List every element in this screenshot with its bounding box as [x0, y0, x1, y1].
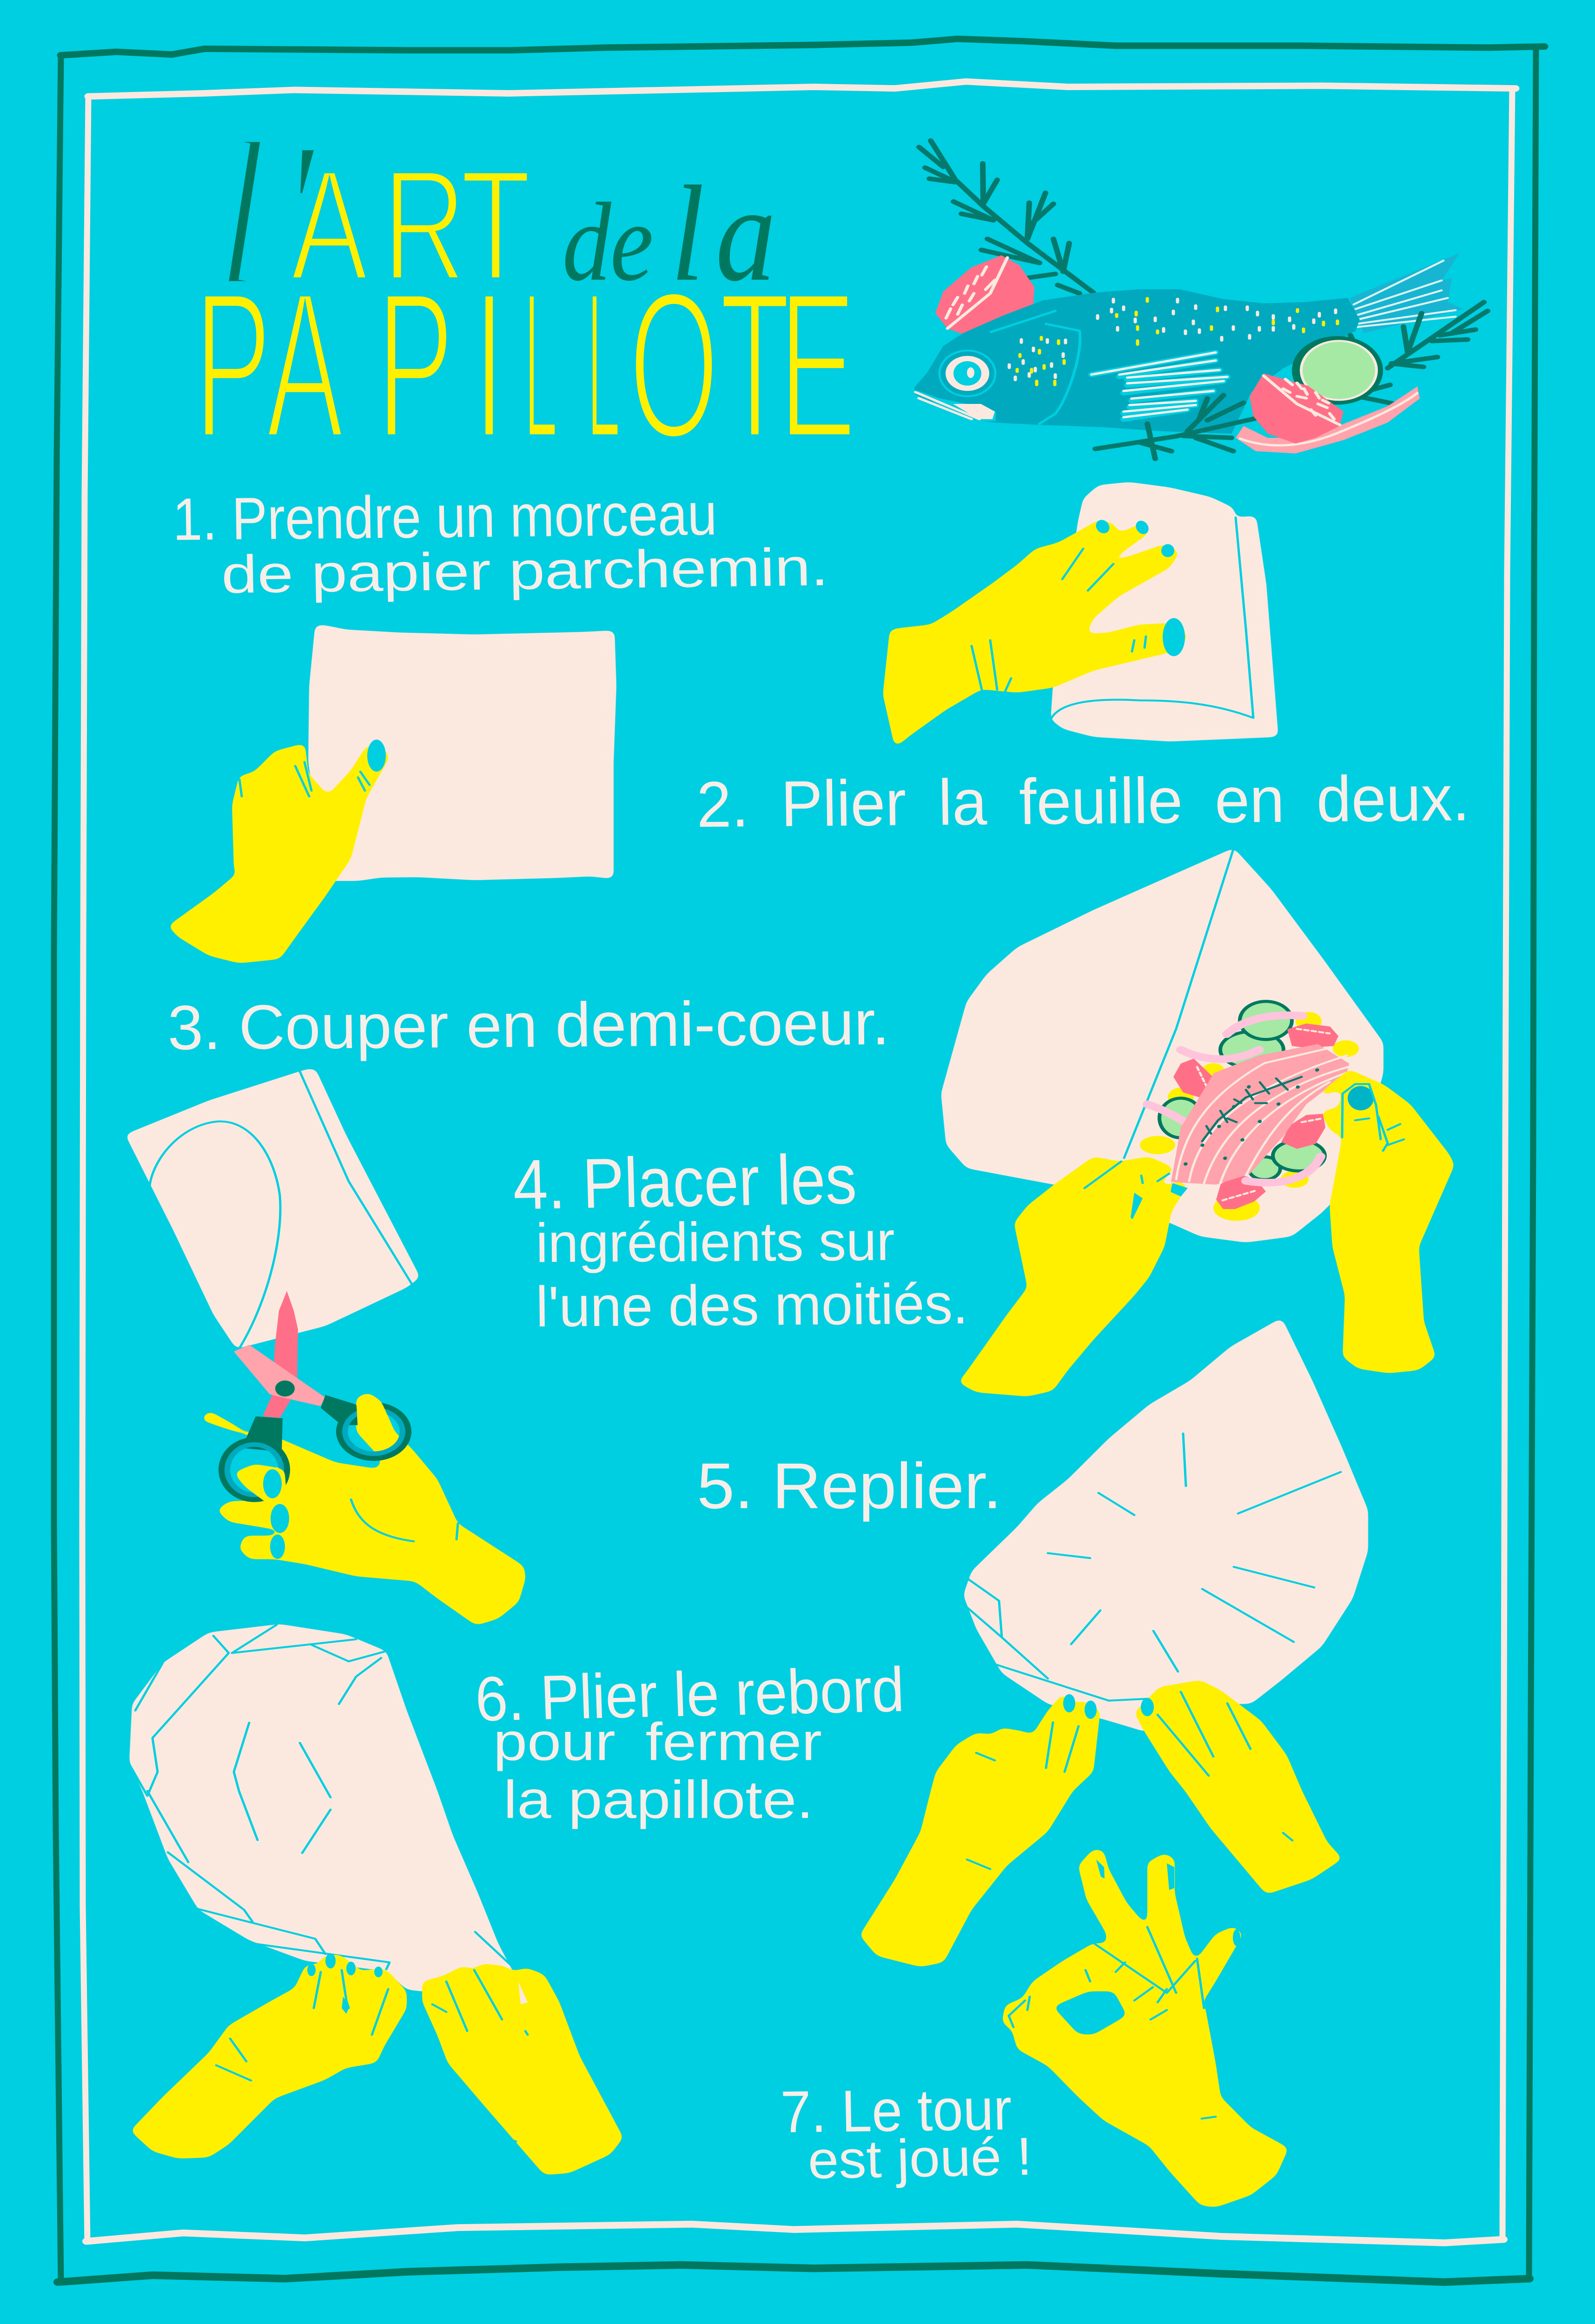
left hand	[130, 1954, 407, 2159]
title word: la: la	[671, 158, 776, 310]
dill sprig right	[1350, 302, 1488, 404]
left hand	[860, 1694, 1100, 1967]
step 1 illustration: paper and hand	[168, 625, 616, 963]
title word: PAPI: PAPI	[194, 248, 505, 482]
title word: OTE: OTE	[629, 248, 856, 482]
fish mouth	[914, 390, 996, 421]
title	[194, 98, 856, 482]
fish gill	[991, 311, 1080, 424]
dark pink blade	[263, 1291, 298, 1418]
right hand	[1134, 1680, 1343, 1895]
fish tail	[1350, 253, 1463, 333]
heart paper	[941, 848, 1383, 1242]
step 6 text: 6. Plier le rebord	[474, 1654, 906, 1734]
fish fillet	[1171, 1044, 1349, 1185]
paper	[129, 1624, 529, 2001]
hand	[200, 1393, 526, 1625]
step 6 illustration: closed papillote and hands	[127, 1624, 623, 2175]
step 6 text	[474, 1654, 906, 1829]
fingertip nails	[1096, 1860, 1105, 1879]
left hand nails	[307, 1964, 316, 1976]
dill sprig bottom	[1095, 395, 1256, 459]
light pink blade	[234, 1345, 325, 1406]
step 5 illustration: folded paper and hands	[860, 1318, 1368, 1967]
step 5 text: 5. Replier.	[697, 1449, 1002, 1522]
hand	[1002, 1849, 1289, 2207]
step 1 text: de papier parchemin.	[221, 537, 829, 605]
step 7 text: 7. Le tour	[780, 2076, 1012, 2145]
dill on fillet	[1202, 1077, 1302, 1141]
tomato seeds	[946, 257, 1007, 329]
onion strips	[1147, 1015, 1321, 1182]
right handle	[321, 1395, 358, 1425]
step 3 illustration: paper and scissors	[125, 1068, 526, 1625]
thumb nail	[1348, 1086, 1374, 1110]
scissors	[222, 1291, 408, 1499]
right hand nail	[1141, 1698, 1154, 1716]
lime slice	[1292, 336, 1383, 405]
nails	[1094, 518, 1112, 535]
fold marks	[966, 1433, 1341, 1701]
step 1 text: 1. Prendre un morceau	[172, 481, 717, 553]
step 4 text	[512, 1139, 968, 1339]
hand	[883, 520, 1188, 748]
tomato behind fish	[935, 255, 1034, 334]
step 7 text: est joué !	[807, 2126, 1033, 2190]
left handle	[242, 1416, 283, 1452]
dill sprig top	[919, 141, 1093, 293]
lime slices	[1159, 1001, 1325, 1180]
fish body	[914, 289, 1360, 434]
nail	[367, 739, 386, 772]
butter blobs	[1140, 1012, 1359, 1221]
fish eye	[940, 350, 995, 396]
tomato halves	[1173, 1023, 1338, 1209]
paper sheet	[308, 625, 616, 881]
step 1 text	[172, 481, 829, 605]
left hand nails	[1063, 1694, 1075, 1712]
fold marks	[127, 1625, 529, 2001]
step 6 text: pour fermer	[493, 1712, 822, 1772]
fish fin	[1092, 352, 1227, 419]
paper	[963, 1318, 1368, 1733]
title word: ART: ART	[291, 137, 531, 314]
fish speckles	[1009, 299, 1336, 380]
step 7 text	[780, 2076, 1033, 2190]
finger gap	[342, 1997, 350, 2014]
step 3 text: 3. Couper en demi-coeur.	[167, 987, 890, 1063]
tomato front	[1250, 373, 1344, 443]
step 6 text: la papillote.	[503, 1770, 814, 1829]
step 7 illustration: OK hand gesture	[1002, 1849, 1289, 2207]
hand	[168, 743, 390, 963]
title word: LL: LL	[524, 249, 621, 482]
title word: l': l'	[216, 98, 319, 330]
nails	[263, 1469, 282, 1498]
fish illustration	[914, 141, 1488, 459]
pink strip	[1236, 386, 1420, 454]
step 4 text: ingrédients sur	[536, 1210, 895, 1274]
fingers over handles	[356, 1393, 395, 1450]
right hand	[422, 1963, 623, 2175]
step 4 text: 4. Placer les	[512, 1139, 858, 1224]
folded paper	[1051, 482, 1278, 741]
step 2 illustration: folded paper and hand	[883, 482, 1278, 748]
left hand	[958, 1156, 1188, 1397]
folded paper with cut guide	[125, 1068, 420, 1349]
title word: de: de	[563, 179, 654, 304]
pivot	[275, 1380, 295, 1397]
right hand	[1313, 1069, 1455, 1373]
step 4 illustration: heart paper, ingredients and hands	[941, 848, 1455, 1397]
step 4 text: l'une des moitiés.	[536, 1272, 968, 1339]
